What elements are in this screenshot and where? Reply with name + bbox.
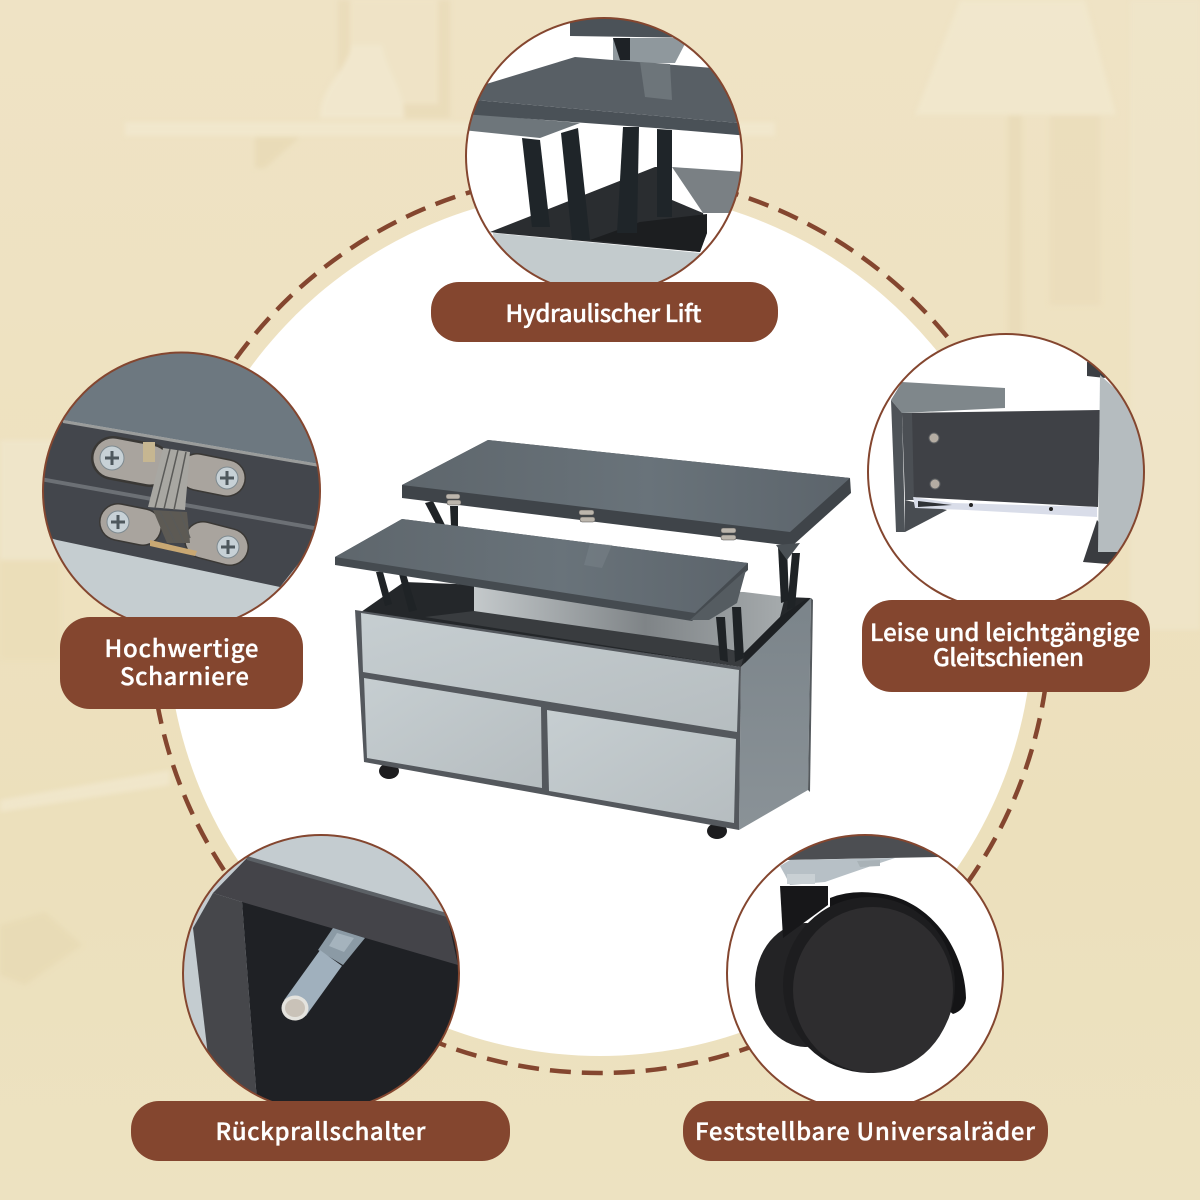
cabinet interior [361,582,811,667]
cabinet side [739,598,811,830]
label: hinges: Hochwertige [104,629,258,664]
front panel: right drawer [547,710,736,823]
label: hinges: Scharniere [120,657,249,692]
table casters [379,763,727,839]
detail: lockable casters [726,834,1004,1101]
label: hinges [60,617,303,709]
label: lockable casters: Feststellbare Universalräder [695,1112,1035,1147]
detail: hinges [40,350,325,635]
front panel: top flap [361,613,739,732]
label: drawer slides: Leise und leichtgängige [870,613,1140,648]
label: rebound switch: Rückprallschalter [216,1112,426,1147]
table hinges [446,494,736,540]
label: rebound switch [131,1101,510,1161]
label: hydraulic lift: Hydraulischer Lift [506,294,702,329]
upper table brackets [776,543,800,560]
cabinet front frame [355,610,741,830]
product: lift-top coffee table [335,440,851,839]
lower tabletop [335,519,748,621]
detail: hydraulic lift [465,17,743,282]
label: drawer slides: Gleitschienen [933,638,1084,673]
dashed ring [150,173,1050,1073]
lift legs [376,501,800,662]
white central disc [167,190,1033,1056]
upper tabletop [402,440,851,546]
label: lockable casters [683,1101,1048,1161]
front panel: left drawer [364,678,542,788]
label: hydraulic lift [431,282,778,342]
label: drawer slides [862,600,1150,692]
detail: rebound switch [180,830,465,1115]
detail: drawer slides [867,333,1145,600]
